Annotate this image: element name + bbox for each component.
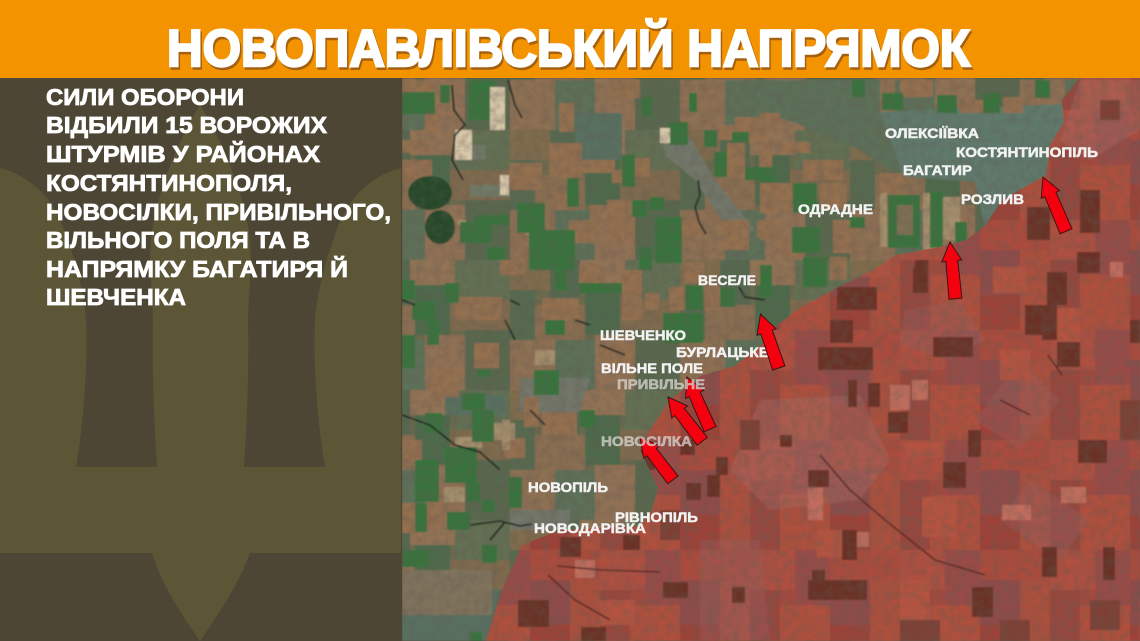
panel: olive sidebar background	[0, 78, 402, 641]
map: red occupied territory	[486, 78, 1140, 641]
map: free territory fields	[402, 78, 1140, 641]
text block: summary: НОВОСІЛКИ, ПРИВІЛЬНОГО,	[46, 199, 391, 225]
label: Одрадне: ОДРАДНЕ	[798, 201, 873, 217]
arrow: Новосілка	[639, 436, 679, 484]
arrow: Костянтинопіль	[1040, 176, 1073, 234]
label: Багатир: БАГАТИР	[903, 162, 972, 178]
label: Костянтинопіль: КОСТЯНТИНОПІЛЬ	[956, 144, 1098, 160]
icon: trident watermark	[0, 105, 401, 641]
text block: summary: СИЛИ ОБОРОНИ	[46, 84, 244, 110]
label: Привільне: ПРИВІЛЬНЕ	[617, 376, 705, 392]
label: Рівнопіль: РІВНОПІЛЬ	[615, 509, 698, 525]
arrow: Привільне	[685, 376, 717, 432]
title: НОВОПАВЛІВСЬКИЙ НАПРЯМОК	[168, 22, 972, 80]
arrow: Розлив	[941, 241, 962, 300]
label: Бурлацьке: БУРЛАЦЬКЕ	[676, 344, 769, 360]
arrow: Вільне Поле	[667, 396, 708, 446]
label: Веселе: ВЕСЕЛЕ	[698, 272, 756, 288]
text block: summary: НАПРЯМКУ БАГАТИРЯ Й	[46, 255, 348, 282]
text block: summary: ШЕВЧЕНКА	[46, 284, 186, 310]
text block: summary: ШТУРМІВ У РАЙОНАХ	[46, 140, 321, 167]
text block: summary: КОСТЯНТИНОПОЛЯ,	[46, 170, 292, 196]
text block: summary	[46, 84, 391, 310]
header band	[0, 0, 1140, 78]
title: НОВОПАВЛІВСЬКИЙ НАПРЯМОК	[167, 19, 970, 78]
panel: satellite map	[402, 78, 1140, 641]
label: Шевченко: ШЕВЧЕНКО	[600, 327, 686, 343]
text block: summary: ВІЛЬНОГО ПОЛЯ ТА В	[46, 227, 310, 253]
label: Вільне Поле: ВІЛЬНЕ ПОЛЕ	[601, 360, 703, 376]
label: Новосілка: НОВОСІЛКА	[601, 433, 692, 449]
label: Новодарівка: НОВОДАРІВКА	[534, 520, 646, 536]
text block: summary: ВІДБИЛИ 15 ВОРОЖИХ	[46, 112, 328, 138]
arrow: Веселе	[756, 313, 786, 371]
label: Олексіївка: ОЛЕКСІЇВКА	[885, 125, 979, 141]
label: Новопіль: НОВОПІЛЬ	[528, 479, 608, 495]
label: Розлив: РОЗЛИВ	[961, 191, 1024, 207]
